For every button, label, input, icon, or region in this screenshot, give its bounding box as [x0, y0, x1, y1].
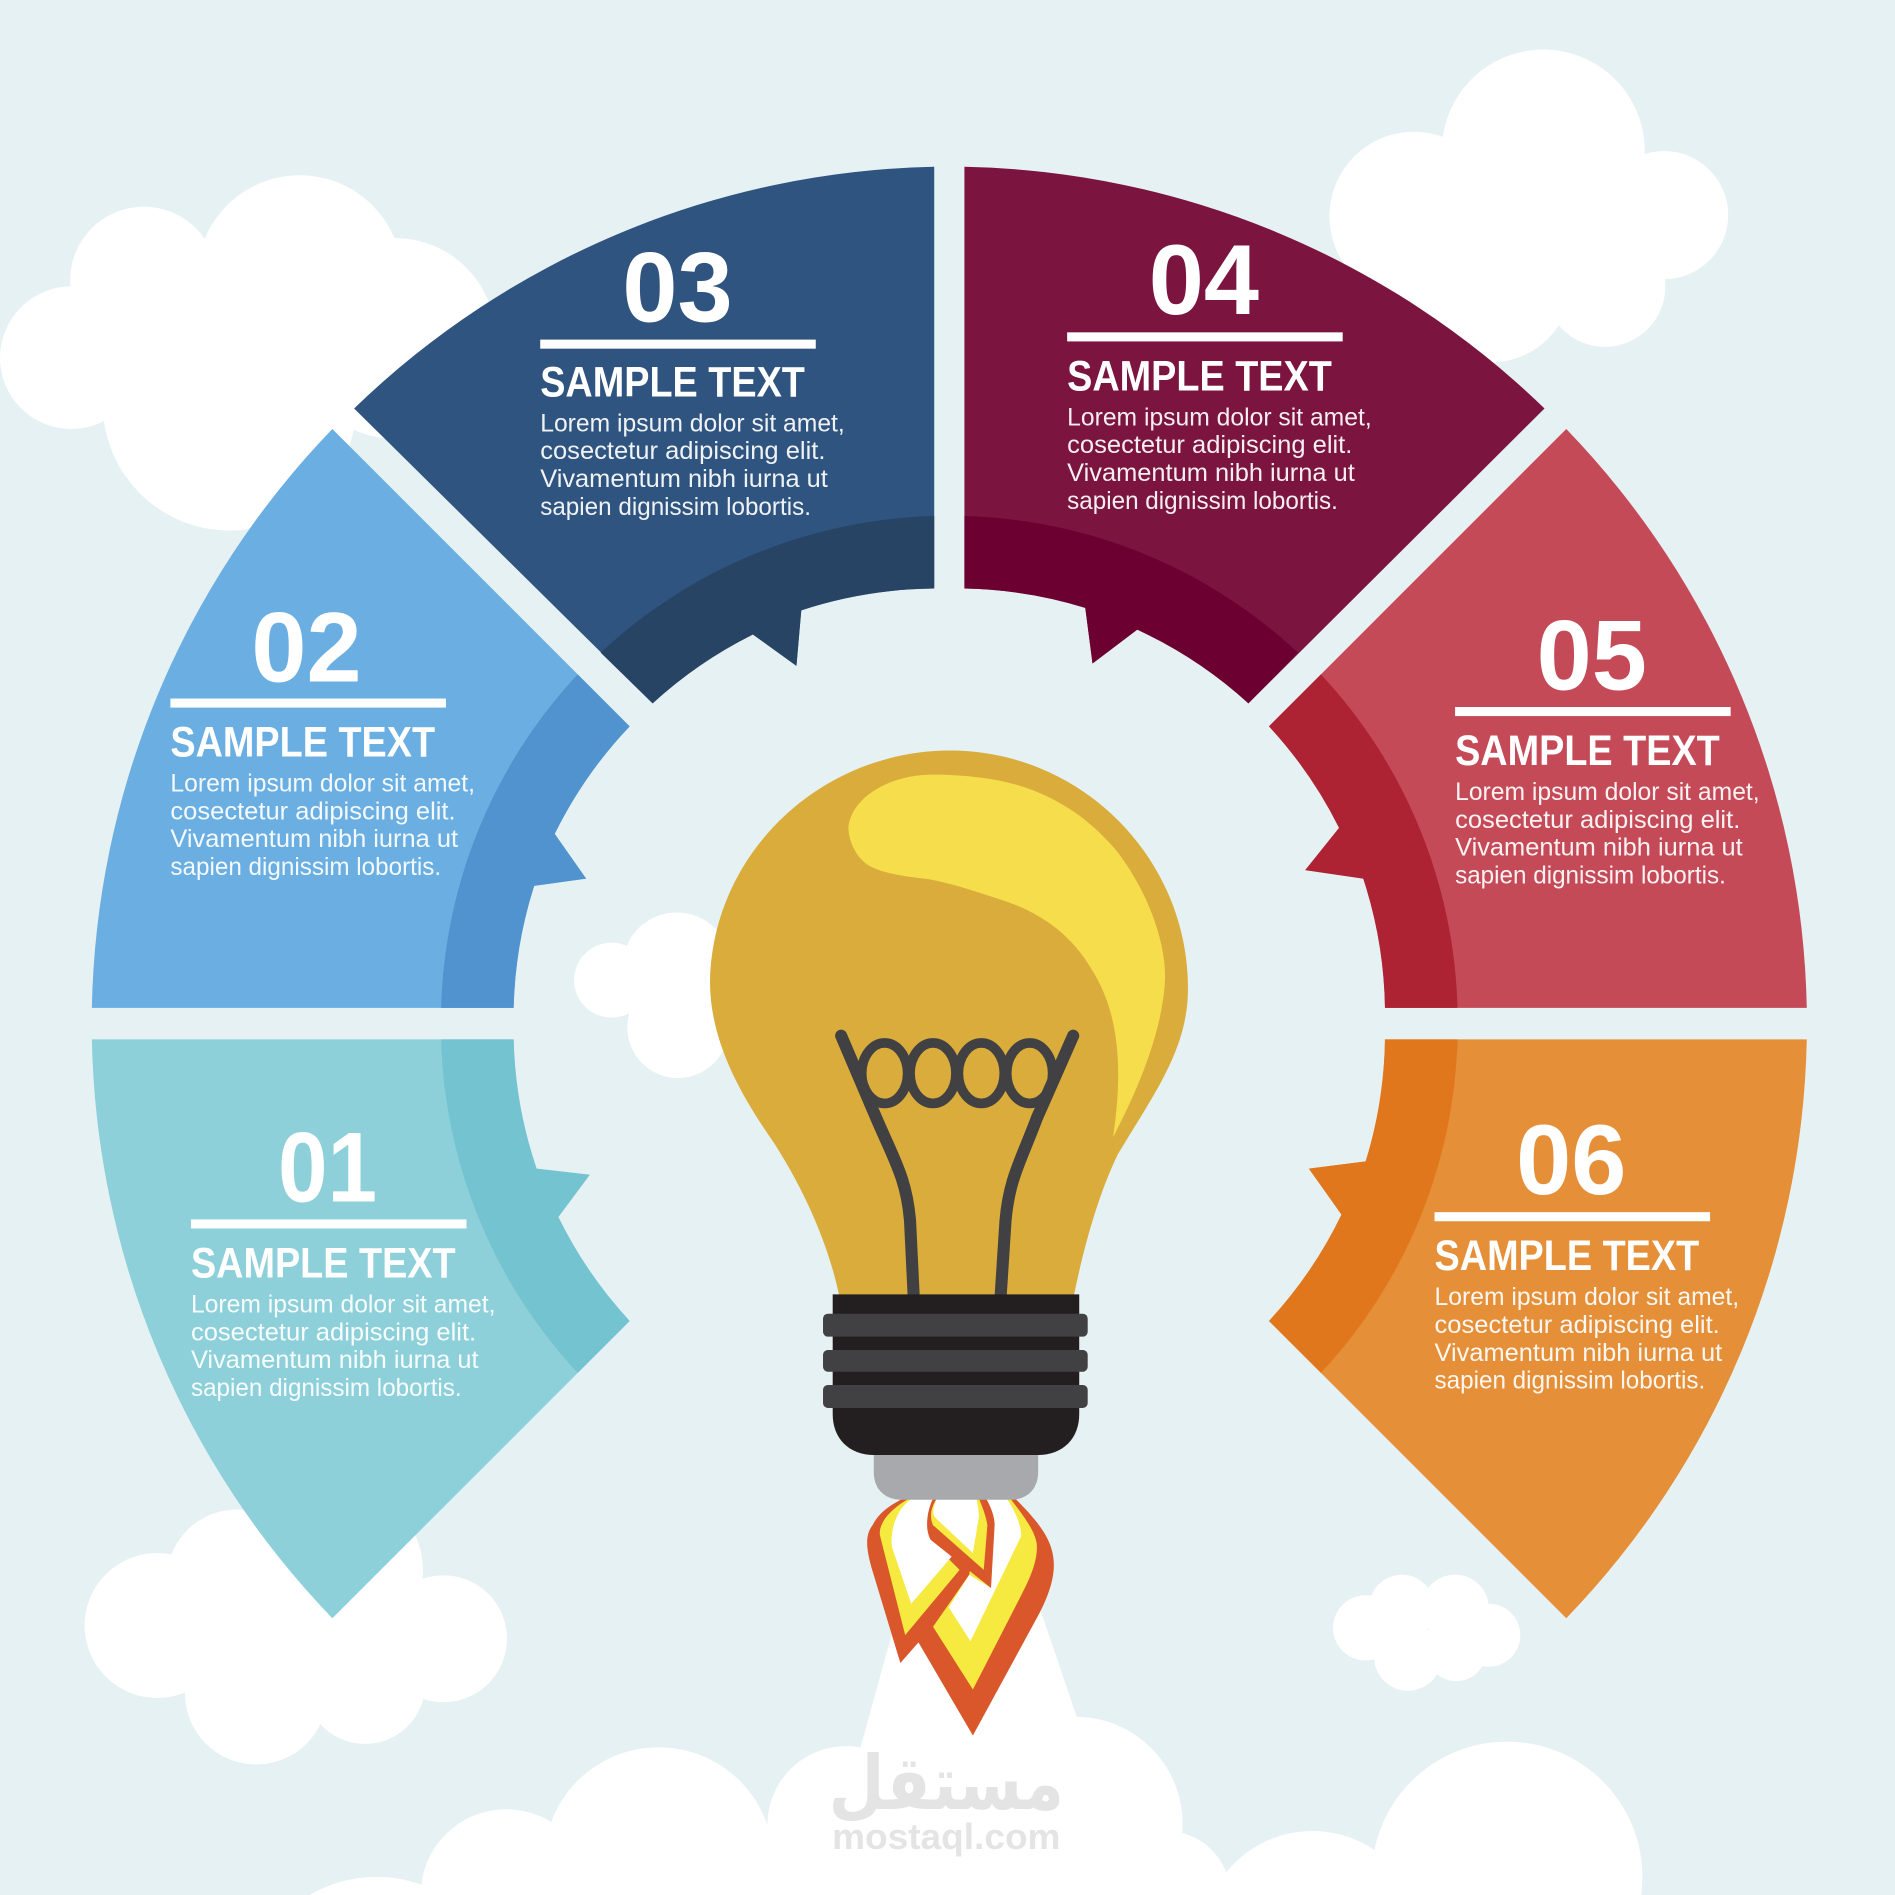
text: 04: Lorem ipsum dolor sit amet, — [1067, 404, 1372, 431]
text: 03: cosectetur adipiscing elit. — [540, 438, 825, 465]
screw base — [833, 1294, 1079, 1455]
text: 04: 04 — [1149, 225, 1259, 336]
text: 04: sapien dignissim lobortis. — [1067, 488, 1338, 515]
text: 03 — [540, 232, 845, 521]
cloud: top left — [0, 175, 496, 531]
text: 06: SAMPLE TEXT — [1435, 1232, 1699, 1279]
panel: 03 — [354, 167, 934, 703]
panel: 04 — [964, 167, 1545, 703]
icon: rocket flame — [867, 1499, 1054, 1735]
filament — [841, 1036, 1073, 1296]
text: 05: sapien dignissim lobortis. — [1455, 862, 1726, 889]
text: 06: cosectetur adipiscing elit. — [1435, 1312, 1720, 1339]
text: 04: cosectetur adipiscing elit. — [1067, 432, 1352, 459]
text: 02: sapien dignissim lobortis. — [170, 854, 441, 881]
panel: 01 — [92, 1039, 630, 1618]
text: 06 — [1435, 1105, 1739, 1395]
text: 01: Vivamentum nibh iurna ut — [191, 1347, 479, 1374]
text: 04: Vivamentum nibh iurna ut — [1067, 460, 1355, 487]
watermark: mostaql.com — [832, 1816, 1060, 1857]
text: 01: 01 — [278, 1112, 377, 1223]
text: 03: sapien dignissim lobortis. — [540, 494, 811, 521]
text: 01: sapien dignissim lobortis. — [191, 1375, 462, 1402]
text: 01: cosectetur adipiscing elit. — [191, 1319, 476, 1346]
text: 05: cosectetur adipiscing elit. — [1455, 807, 1740, 834]
text: 02: Vivamentum nibh iurna ut — [170, 826, 458, 853]
panel: 05 — [1269, 429, 1807, 1008]
text: 04 — [1067, 225, 1372, 515]
text: 05: Lorem ipsum dolor sit amet, — [1455, 779, 1760, 806]
text: 02: Lorem ipsum dolor sit amet, — [170, 771, 475, 798]
text: 02: 02 — [251, 593, 362, 704]
icon: light bulb — [710, 751, 1188, 1500]
text: 01: SAMPLE TEXT — [191, 1239, 456, 1286]
cloud: behind bulb — [574, 912, 731, 1078]
cloud: bottom bank — [309, 1717, 1642, 1895]
text: 01: Lorem ipsum dolor sit amet, — [191, 1291, 496, 1318]
text: 05: SAMPLE TEXT — [1455, 727, 1720, 774]
text: 02: cosectetur adipiscing elit. — [170, 798, 456, 825]
text: 03: Vivamentum nibh iurna ut — [540, 466, 828, 493]
bulb highlight — [848, 775, 1165, 1137]
panel: 06 — [1269, 1039, 1807, 1618]
cloud: bottom left — [85, 1484, 507, 1764]
text: 03: SAMPLE TEXT — [540, 358, 805, 405]
text: 06: Vivamentum nibh iurna ut — [1435, 1340, 1722, 1367]
rocket exhaust beam — [838, 1511, 1115, 1831]
panel: 02 — [92, 429, 630, 1008]
text: 05 — [1455, 600, 1760, 889]
text: 04: SAMPLE TEXT — [1067, 352, 1332, 399]
text: 03: Lorem ipsum dolor sit amet, — [540, 410, 845, 437]
bulb glass — [710, 751, 1188, 1299]
text: 06: sapien dignissim lobortis. — [1435, 1368, 1705, 1395]
text: 06: 06 — [1516, 1105, 1626, 1216]
cloud: bottom right small — [1333, 1575, 1520, 1691]
text: 05: Vivamentum nibh iurna ut — [1455, 835, 1743, 862]
text: 06: Lorem ipsum dolor sit amet, — [1435, 1284, 1739, 1311]
metal tip — [874, 1455, 1038, 1500]
text: 02: SAMPLE TEXT — [170, 719, 435, 766]
text: 03: 03 — [622, 232, 733, 343]
text: 05: 05 — [1537, 600, 1647, 711]
cloud: top right — [1329, 50, 1728, 363]
text: 01 — [191, 1112, 496, 1402]
text: 02 — [170, 593, 475, 881]
watermark: مستقل — [829, 1741, 1064, 1827]
